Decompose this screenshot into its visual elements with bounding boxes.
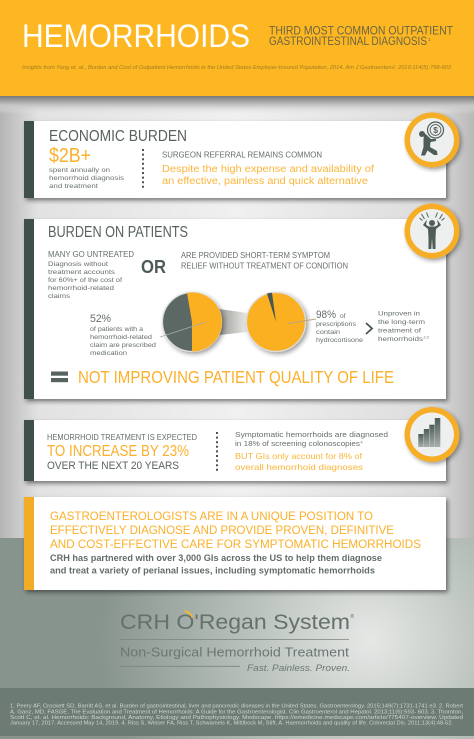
forecast text: OVER THE NEXT 20 YEARS [47,460,179,472]
logo: CRH O'Regan System [120,611,354,674]
heading: economic burden: ECONOMIC BURDEN [49,128,187,145]
untreated column [48,249,134,300]
icon: rising bars [404,407,460,462]
subtitle: THIRD MOST COMMON OUTPATIENT [269,24,454,38]
footer: references: Scott C, et. al. Hemorrhoids: Background, Anatomy, Etiology and Pathophysiology. Medscape. https://emedicine.medscape.com/article/775407-overview. Updated [10,715,463,721]
stat: 52%: medication [90,350,127,357]
header band [0,0,474,96]
stat: 52%: hemorrhoid-related [90,334,152,341]
untreated column: MANY GO UNTREATED [48,249,134,259]
stat: 98%: of [340,313,346,320]
title: HEMORRHOIDS [22,18,250,54]
highlighted diagnosis share [235,451,363,472]
partnership text: and treat a variety of perianal issues, including symptomatic hemorrhoids [50,566,375,576]
pie chart: 52% [160,292,222,352]
untreated column: treatment accounts [48,269,116,276]
call to action heading [50,509,421,551]
highlighted diagnosis share: overall hemorrhoid diagnoses [235,462,363,472]
unproven text: the long-term [378,319,425,326]
unproven text: Unproven in [378,310,420,318]
diagnosis text: Symptomatic hemorrhoids are diagnosed [235,430,388,439]
forecast text: TO INCREASE BY 23% [47,443,189,460]
stat: 98%: contain [316,329,340,336]
footer: references: 1. Peery AF, Crockett SD, Barritt AS, et al. Burden of gastrointestinal, liver and pancreatic diseases in the United States. Gastroenterology. 2015;149(7):1731-1741 e3. 2. Robert [10,704,464,710]
untreated column: for 60%+ of the cost of [48,277,122,284]
panel: treatment increase [24,420,446,481]
call to action heading: GASTROENTEROLOGISTS ARE IN A UNIQUE POSITION TO [50,509,373,523]
stat description: hemorrhoid diagnosis [49,175,125,182]
unproven text: treatment of [378,328,421,334]
subtitle: 1 [428,37,431,42]
short-term relief text: ARE PROVIDED SHORT-TERM SYMPTOM [181,250,330,260]
stat description: and treatment [49,183,98,190]
stat description: spent annually on [49,167,110,174]
or label: OR [141,257,166,277]
forecast text: HEMORRHOID TREATMENT IS EXPECTED [47,433,197,442]
unproven text: hemorrhoids [378,336,424,343]
source note: Insights from Yang et. al., Burden and Cost of Outpatient Hemorrhoids in the United States Employer-Insured Population, 2014. Am J Gastroenterol. 2019;114(5):798-803 [22,65,452,71]
call to action heading: AND COST-EFFECTIVE CARE FOR SYMPTOMATIC HEMORRHOIDS [50,537,421,551]
tagline: Non-Surgical Hemorrhoid Treatment [120,644,349,660]
surgeon referral text: SURGEON REFERRAL REMAINS COMMON [162,150,322,160]
forecast text [47,433,197,472]
icon: stressed person [404,204,460,258]
stat: 52%: of patients with a [90,326,143,333]
untreated column: Diagnosis without [48,261,108,268]
stat description [49,167,125,190]
diagnosis text: 4 [360,440,363,444]
untreated column: claims [48,293,71,300]
stat: 98% [316,309,363,344]
arrow: chevron [366,323,372,334]
partnership text [50,553,382,576]
call to action heading: EFFECTIVELY DIAGNOSE AND PROVIDE PROVEN, DEFINITIVE [50,523,394,537]
stat: 98%: hydrocortisone [316,337,363,344]
highlighted statement [162,164,374,187]
heading: burden on patients: BURDEN ON PATIENTS [48,224,188,241]
slogan: Fast. Painless. Proven. [247,663,350,674]
highlighted diagnosis share: BUT GIs only account for 8% of [235,451,363,461]
stat: $2B+: $2B+ [49,144,91,167]
connector between pies [219,309,248,335]
diagnosis text [235,430,388,448]
logo: CRH O'Regan System: ® [350,613,354,620]
stat: 52% [90,313,156,357]
untreated column: hemorrhoid-related [48,285,114,292]
panel: economic burden [24,121,446,198]
unproven text [378,310,429,343]
unproven text: 2,3 [424,336,429,340]
icon: person carrying money [404,112,460,168]
equals sign [51,372,68,382]
panel: call to action [24,497,446,590]
highlighted statement: Despite the high expense and availability of [162,164,374,175]
stat: 98%: prescriptions [316,321,357,328]
stat: 52%: claim are prescribed [90,342,156,349]
short-term relief text: RELIEF WITHOUT TREATMENT OF CONDITION [181,260,348,270]
logo: CRH O'Regan System: CRH O'Regan System [120,611,350,634]
short-term relief text [181,250,348,270]
panel: burden on patients [24,219,446,399]
subtitle [269,24,454,48]
icon: person carrying money: $ [433,125,438,135]
pie chart: 98% [246,292,316,352]
footer: references: A. Ganz, MD, FASGE. The Evaluation and Treatment of Hemorrhoids: A Guide for the Gastroenterologist. Clin Gastroenterol and Hepatol. 2013;11(6):593- 603. 3. Thornton, [10,710,463,716]
conclusion: NOT IMPROVING PATIENT QUALITY OF LIFE [78,367,394,387]
partnership text: CRH has partnered with over 3,000 GIs across the US to help them diagnose [50,553,382,564]
highlighted statement: an effective, painless and quick alternative [162,176,368,187]
stat: 52%: 52% [90,313,111,325]
subtitle: GASTROINTESTINAL DIAGNOSIS [269,34,427,48]
footer: references: January 17, 2017. Accessed May 14, 2019. 4. Riss S, Weiser FA, Riss T, Schwameis K, Mittlbock M, Stift, A. Haemorrhoids and quality of life. Colorectal Dis. 2011;13(4):48-52. [10,720,453,726]
stat: 98%: 98% [316,309,336,321]
diagnosis text: in 18% of screening colonoscopies [235,439,360,448]
footer: references [0,688,474,736]
